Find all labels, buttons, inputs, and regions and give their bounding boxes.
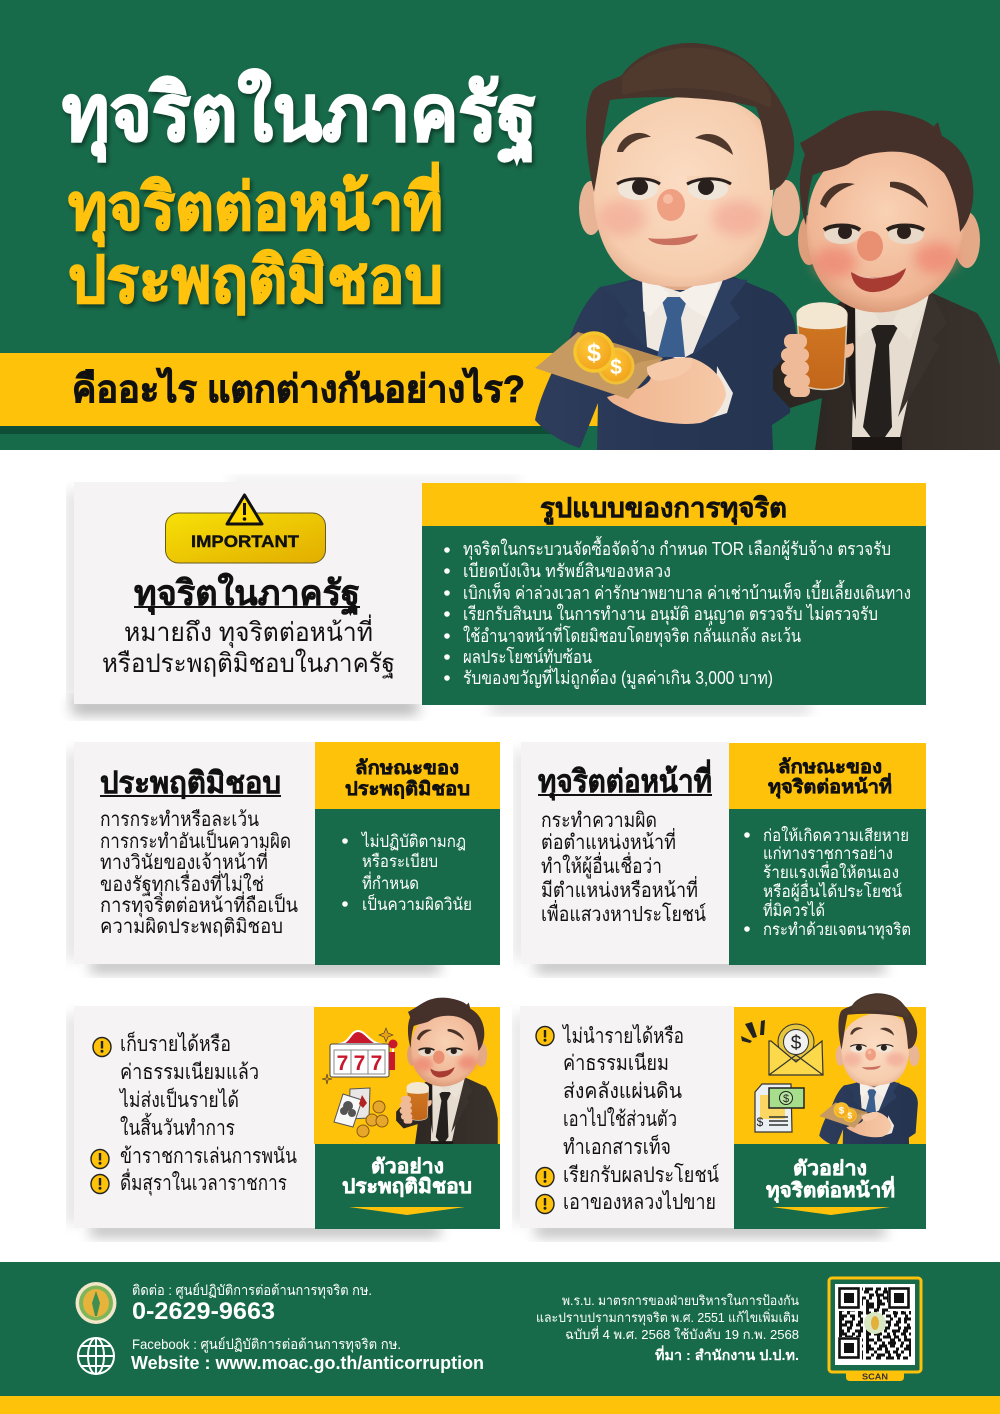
list: misconduct examples: ค่าธรรมเนียมแล้ว — [120, 1061, 259, 1084]
contact text: ติดต่อ : ศูนย์ปฏิบัติการต่อต้านการทุจริต กษ. — [132, 1282, 372, 1299]
qr code — [829, 1278, 921, 1382]
text: malfeasance definition: ต่อตำแหน่งหน้าที่ — [541, 828, 676, 854]
text: misconduct definition: การกระทำหรือละเว้น — [100, 809, 259, 831]
qr code: SCAN — [862, 1372, 888, 1382]
list: misconduct examples: ข้าราชการเล่นการพนัน — [120, 1145, 297, 1168]
list: patterns — [422, 526, 926, 705]
title — [62, 68, 537, 316]
list: malfeasance examples: เอาไปใช้ส่วนตัว — [563, 1107, 677, 1131]
legal note: ฉบับที่ 4 พ.ศ. 2568 ใช้บังคับ 19 ก.พ. 2568 — [565, 1326, 799, 1342]
icon: receipt and banknote: $ — [783, 1093, 789, 1105]
legal note: ที่มา : สำนักงาน ป.ป.ท. — [655, 1345, 799, 1363]
icon: slot machine — [322, 1028, 398, 1084]
list: misconduct examples: เก็บรายได้หรือ — [120, 1030, 231, 1056]
list: malfeasance examples: เรียกรับผลประโยชน์ — [563, 1163, 719, 1187]
definition heading: ทุจริตในภาครัฐ — [134, 572, 360, 616]
list: patterns: ใช้อำนาจหน้าที่โดยมิชอบโดยทุจริต กลั่นแกล้ง ละเว้น — [463, 623, 801, 647]
image panel: gambling and drinking — [314, 998, 500, 1147]
text: malfeasance definition: กระทำความผิด — [541, 809, 657, 832]
definition text: หมายถึง ทุจริตต่อหน้าที่ — [124, 614, 373, 648]
important badge: IMPORTANT — [191, 532, 300, 551]
hero banner — [0, 353, 598, 434]
list: malfeasance traits: แก่ทางราชการอย่าง — [763, 845, 893, 863]
website text — [131, 1336, 484, 1373]
list: patterns: เบิกเท็จ ค่าล่วงเวลา ค่ารักษาพยาบาล ค่าเช่าบ้านเท็จ เบี้ยเลี้ยงเดินทาง — [463, 580, 911, 603]
legal note: พ.ร.บ. มาตรการของฝ่ายบริหารในการป้องกัน — [562, 1293, 799, 1308]
image panel: envelope and documents — [734, 993, 926, 1147]
definition text: หรือประพฤติมิชอบในภาครัฐ — [102, 648, 395, 679]
header: malfeasance traits: ลักษณะของ — [778, 757, 882, 778]
website text: Facebook : ศูนย์ปฏิบัติการต่อต้านการทุจริต กษ. — [132, 1336, 401, 1353]
list: patterns: เบียดบังเงิน ทรัพย์สินของหลวง — [463, 561, 671, 581]
icon: slot machine: 7 — [371, 1052, 382, 1075]
example label: misconduct: ประพฤติมิชอบ — [342, 1176, 472, 1198]
icon: slot machine: 7 — [337, 1052, 348, 1075]
list: malfeasance examples: ทำเอกสารเท็จ — [563, 1133, 671, 1159]
list: malfeasance traits: ก่อให้เกิดความเสียหาย — [763, 826, 909, 845]
text: misconduct definition: การกระทำอันเป็นความผิด — [100, 828, 291, 853]
icon: envelope with coin: $ — [791, 1033, 802, 1054]
example label: malfeasance: ตัวอย่าง — [793, 1158, 867, 1180]
definition text — [102, 614, 395, 679]
list: malfeasance traits: กระทำด้วยเจตนาทุจริต — [763, 921, 911, 940]
panel: what is corruption — [68, 478, 926, 714]
icon: receipt and banknote: $ — [757, 1115, 764, 1129]
list: misconduct examples: ดื่มสุราในเวลาราชการ — [120, 1168, 287, 1196]
text: misconduct definition: การทุจริตต่อหน้าที่ถือเป็น — [100, 891, 298, 918]
example label: misconduct — [315, 1144, 500, 1229]
header: malfeasance traits — [729, 743, 926, 809]
header: patterns — [422, 483, 926, 526]
text: misconduct definition — [100, 809, 298, 938]
panel: malfeasance examples — [514, 993, 926, 1236]
text: misconduct definition: ความผิดประพฤติมิชอบ — [100, 916, 283, 938]
list: malfeasance traits: หรือผู้อื่นได้ประโยชน์ — [763, 880, 902, 902]
icon: cards and coins — [334, 1088, 388, 1137]
list: patterns: รับของขวัญที่ไม่ถูกต้อง (มูลค่าเกิน 3,000 บาท) — [463, 665, 773, 689]
text: malfeasance definition — [541, 809, 706, 926]
list: malfeasance traits: ที่มิควรได้ — [763, 899, 825, 920]
icon: envelope with coin — [769, 1024, 823, 1075]
contact text — [132, 1282, 372, 1325]
contact text: 0-2629-9663 — [132, 1298, 275, 1325]
list: misconduct examples: ในสิ้นวันทำการ — [120, 1113, 235, 1140]
icon: alert marks — [741, 1020, 765, 1043]
icon: receipt and banknote — [755, 1084, 804, 1132]
title: ทุจริตในภาครัฐ — [62, 68, 537, 164]
website text: Website : www.moac.go.th/anticorruption — [131, 1353, 484, 1373]
list: malfeasance traits: ร้ายแรงเพื่อให้ตนเอง — [763, 861, 899, 882]
text: malfeasance definition: เพื่อแสวงหาประโยชน์ — [541, 900, 706, 926]
list: misconduct examples — [91, 1030, 297, 1196]
list: malfeasance examples — [536, 1024, 719, 1214]
list: malfeasance examples: ส่งคลังแผ่นดิน — [563, 1080, 682, 1103]
header: malfeasance traits: ทุจริตต่อหน้าที่ — [768, 773, 892, 799]
list: misconduct traits: เป็นความผิดวินัย — [362, 893, 472, 914]
icon: globe — [78, 1338, 114, 1374]
list: malfeasance traits — [729, 809, 926, 965]
text: misconduct definition: ทางวินัยของเจ้าหน้าที่ — [100, 848, 268, 874]
header: misconduct traits: ประพฤติมิชอบ — [345, 779, 470, 800]
header: misconduct traits: ลักษณะของ — [355, 758, 459, 779]
text: malfeasance definition: มีตำแหน่งหรือหน้าที่ — [541, 876, 698, 902]
heading: malfeasance: ทุจริตต่อหน้าที่ — [538, 759, 712, 801]
example label: misconduct: ตัวอย่าง — [371, 1156, 444, 1178]
example label: malfeasance — [734, 1144, 926, 1229]
list: misconduct examples: ไม่ส่งเป็นรายได้ — [118, 1086, 239, 1112]
character: man with beer — [773, 110, 1000, 450]
example label: malfeasance: ทุจริตต่อหน้าที่ — [766, 1175, 895, 1203]
character: man with envelope small — [819, 993, 919, 1147]
list: malfeasance examples: ค่าธรรมเนียม — [563, 1052, 669, 1075]
list: misconduct traits — [315, 809, 500, 965]
header: misconduct traits — [315, 742, 500, 809]
text: malfeasance definition: ทำให้ผู้อื่นเชื่อว่า — [541, 852, 662, 879]
logo: ministry seal — [76, 1282, 116, 1324]
panel: malfeasance — [515, 742, 926, 972]
list: malfeasance examples: เอาของหลวงไปขาย — [563, 1190, 716, 1214]
heading: misconduct: ประพฤติมิชอบ — [100, 767, 281, 800]
list: misconduct traits: หรือระเบียบ — [362, 852, 438, 871]
hero background — [0, 0, 1000, 450]
list: patterns: เรียกรับสินบน ในการทำงาน อนุมัติ อนุญาต ตรวจรับ ไม่ตรวจรับ — [463, 603, 878, 625]
important badge — [166, 495, 326, 563]
title: ประพฤติมิชอบ — [68, 244, 443, 316]
banner text: คืออะไร แตกต่างกันอย่างไร? — [72, 367, 525, 411]
list: patterns: ทุจริตในกระบวนจัดซื้อจัดจ้าง กำหนด TOR เลือกผู้รับจ้าง ตรวจรับ — [463, 536, 891, 560]
text: misconduct definition: ของรัฐทุกเรื่องที่ไม่ใช่ — [100, 870, 264, 897]
panel: misconduct examples — [68, 998, 500, 1236]
icon: slot machine: 7 — [354, 1052, 365, 1075]
footer — [0, 1262, 1000, 1414]
list: patterns: ผลประโยชน์ทับซ้อน — [463, 646, 592, 667]
list: misconduct traits: ไม่ปฏิบัติตามกฎ — [360, 831, 466, 851]
list: misconduct traits: ที่กำหนด — [362, 871, 419, 893]
list: malfeasance examples: ไม่นำรายได้หรือ — [561, 1024, 684, 1048]
legal note — [536, 1293, 799, 1363]
legal note: และปราบปรามการทุจริต พ.ศ. 2551 แก้ไขเพิ่มเติม — [536, 1309, 799, 1326]
character: man with beer small — [396, 998, 498, 1147]
panel: misconduct — [68, 742, 500, 972]
character: man with envelope — [535, 43, 800, 450]
header: patterns: รูปแบบของการทุจริต — [540, 493, 787, 525]
title: ทุจริตต่อหน้าที่ — [68, 162, 443, 247]
